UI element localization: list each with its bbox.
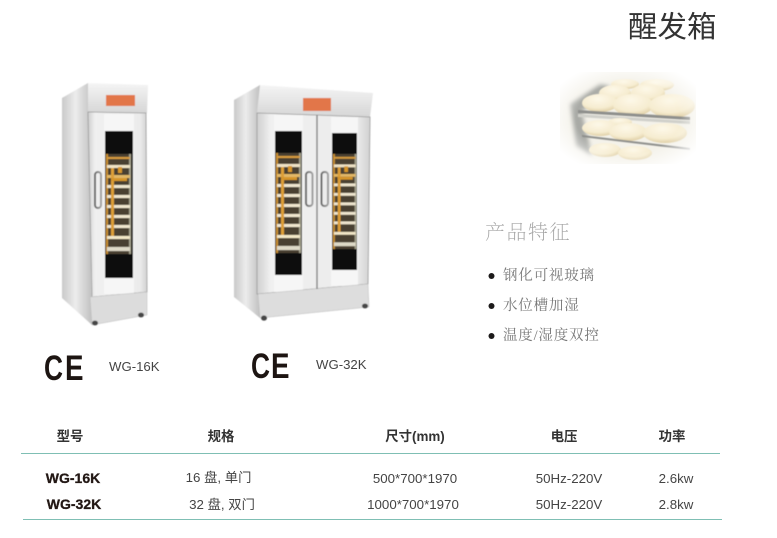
row WG-32K: 1000*700*1970 [367,497,459,512]
row WG-16K: 50Hz-220V [536,471,602,486]
feature 2: 水位槽加湿 [503,297,580,314]
CE mark right: E [271,347,290,386]
side panel [62,83,92,325]
row WG-32K [47,496,694,512]
table header: 规格 [208,428,235,444]
table header [57,428,685,444]
window [105,131,133,278]
caster left [261,315,267,321]
table header: 功率 [659,428,685,444]
control panel [106,95,135,106]
left door inner panel [274,115,303,292]
table header: 型号 [57,429,83,444]
specification table [21,428,722,520]
door [88,112,147,297]
row WG-16K: 500*700*1970 [373,471,457,486]
left window [275,131,302,275]
table header: 尺寸(mm) [385,428,445,444]
side panel [234,85,260,318]
door inner panel [104,114,134,294]
oven rack [106,154,131,254]
left rack [276,153,301,253]
row WG-32K: WG-32K [47,496,101,512]
door gap [316,115,318,289]
door handle [95,172,101,208]
top cap [88,83,148,113]
right window [332,133,357,270]
row WG-32K: 32 盘, 双门 [189,496,255,512]
features heading: 产品特征 [485,221,571,244]
left handle [306,172,312,206]
product photo: single-door proofer WG-16K [62,83,148,325]
row WG-16K [46,469,694,486]
caster left [92,321,98,325]
top cap [257,85,373,117]
model label WG-16K: WG-16K [109,359,160,374]
CE mark left: E [65,349,84,388]
base [90,292,147,325]
title: 醒发箱 [628,11,717,44]
row WG-16K: WG-16K [46,470,100,486]
doors [257,113,370,294]
right door inner panel [331,117,358,286]
control panel [303,98,331,111]
right rack [333,154,356,249]
CE mark left: C [44,349,63,388]
right handle [322,172,328,206]
row WG-32K: 2.8kw [659,497,694,512]
product photo: double-door proofer WG-32K [234,85,373,321]
table header: 电压 [551,429,577,444]
feature 1: 钢化可视玻璃 [503,267,595,284]
feature 3: 温度/湿度双控 [503,326,600,344]
photo: dough on proofing trays [560,72,696,164]
CE mark right: C [251,347,270,386]
feature list [488,267,600,344]
base [258,284,369,318]
model label WG-32K: WG-32K [316,357,367,372]
caster right [138,313,144,317]
row WG-16K: 2.6kw [659,471,694,486]
row WG-16K: 16 盘, 单门 [186,469,251,485]
caster right [362,304,368,308]
CE mark right [251,347,290,386]
header rule [21,452,720,454]
row WG-32K: 50Hz-220V [536,497,602,512]
CE mark left [44,349,84,388]
bottom rule [23,518,722,520]
